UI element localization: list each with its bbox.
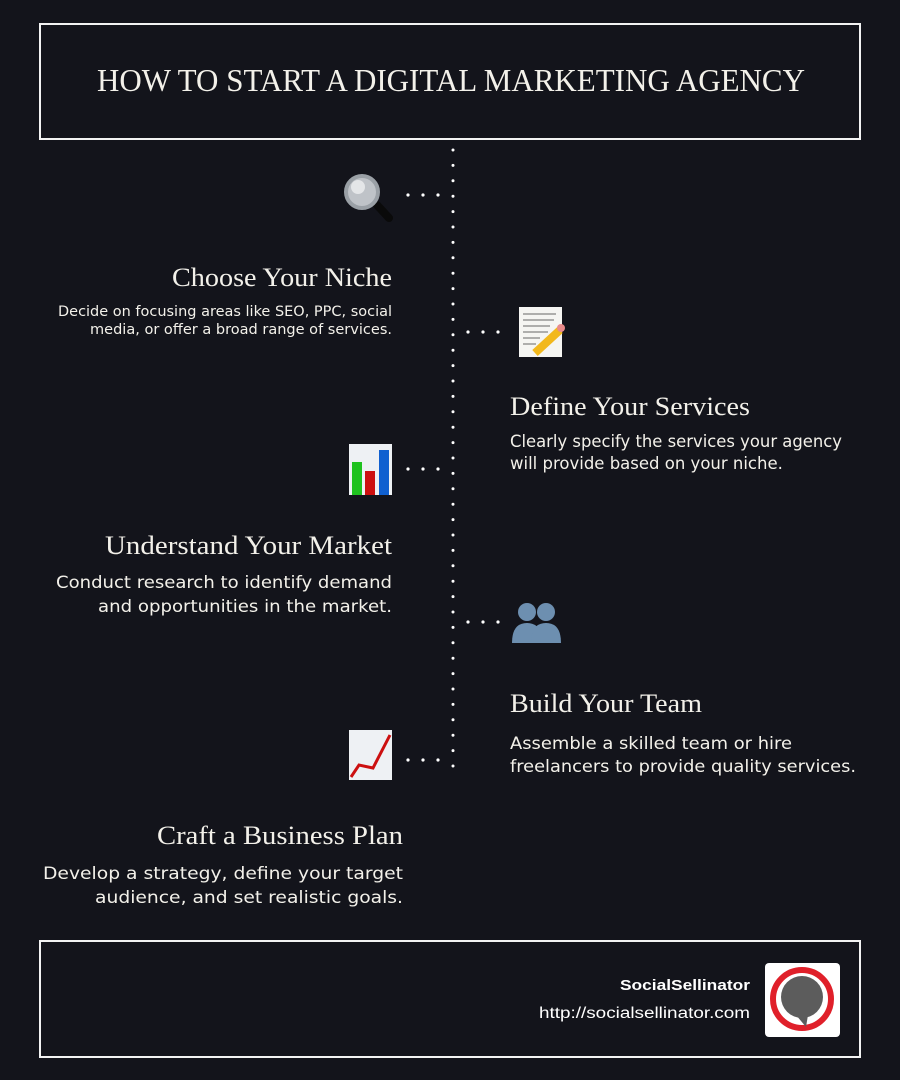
brand name: SocialSellinator <box>620 977 750 994</box>
step 4: Build Your Team: Build Your Team <box>510 689 702 718</box>
step 2: Define Your Services: Clearly specify the services your agency <box>510 432 842 451</box>
step 1: Choose Your Niche: media, or offer a broad range of services. <box>90 322 392 338</box>
step 5: Craft a Business Plan: Develop a strategy, define your target <box>43 864 404 883</box>
timeline dotted line <box>406 150 500 766</box>
step 3: Understand Your Market: Conduct research to identify demand <box>56 573 392 592</box>
icon: memo pencil <box>519 307 565 357</box>
step 2: Define Your Services <box>510 392 842 473</box>
footer box <box>40 941 860 1057</box>
step 4: Build Your Team: Assemble a skilled team or hire <box>510 734 792 753</box>
logo <box>765 963 840 1037</box>
step 5: Craft a Business Plan: Craft a Business Plan <box>157 821 403 850</box>
icon: bar chart <box>349 444 392 495</box>
step 1: Choose Your Niche <box>58 263 392 338</box>
step 2: Define Your Services: Define Your Services <box>510 392 750 421</box>
step 1: Choose Your Niche: Choose Your Niche <box>172 263 392 292</box>
url: http://socialsellinator.com <box>539 1005 750 1022</box>
step 5: Craft a Business Plan: audience, and set realistic goals. <box>95 888 403 907</box>
step 3: Understand Your Market <box>56 531 393 616</box>
step 3: Understand Your Market: and opportunities in the market. <box>98 597 392 616</box>
icon: chart increasing <box>349 730 392 780</box>
step 4: Build Your Team <box>510 689 856 776</box>
step 3: Understand Your Market: Understand Your Market <box>105 531 393 560</box>
step 5: Craft a Business Plan <box>43 821 404 907</box>
icon: people <box>512 603 561 643</box>
icon: magnifying glass <box>346 176 389 218</box>
title box <box>40 24 860 139</box>
title: HOW TO START A DIGITAL MARKETING AGENCY <box>97 62 805 98</box>
step 1: Choose Your Niche: Decide on focusing areas like SEO, PPC, social <box>58 304 392 320</box>
step 4: Build Your Team: freelancers to provide quality services. <box>510 757 856 776</box>
step 2: Define Your Services: will provide based on your niche. <box>510 454 783 473</box>
